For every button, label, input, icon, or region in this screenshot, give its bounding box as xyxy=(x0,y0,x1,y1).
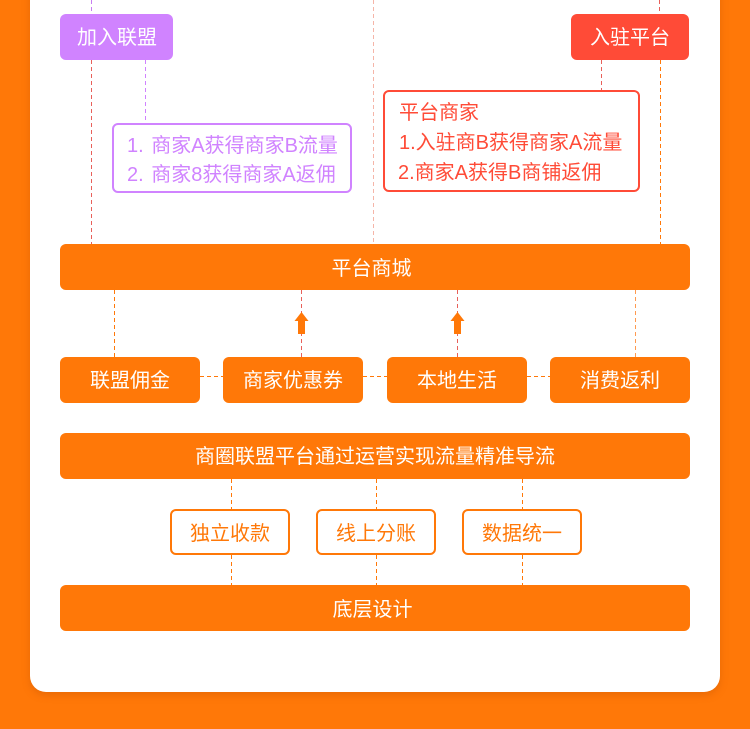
note: alliance benefits: 1. 商家A获得商家B流量 xyxy=(127,135,338,157)
bar: alliance traffic statement xyxy=(60,433,690,479)
box: consumer rebate: 消费返利 xyxy=(580,370,660,392)
box: independent payment xyxy=(170,509,290,555)
button: join platform: 入驻平台 xyxy=(590,27,670,49)
box: independent payment: 独立收款 xyxy=(190,523,270,545)
bar: alliance traffic statement: 商圈联盟平台通过运营实现流量精准导流 xyxy=(195,446,555,468)
box: online split: 线上分账 xyxy=(336,523,416,545)
box: alliance commission xyxy=(60,357,200,403)
note: platform merchant benefits: 平台商家 xyxy=(399,102,479,124)
bar: base design xyxy=(60,585,690,631)
box: unified data: 数据统一 xyxy=(482,523,562,545)
button: join alliance: 加入联盟 xyxy=(77,27,157,49)
note: platform merchant benefits: 2.商家A获得B商铺返佣 xyxy=(398,162,601,184)
button: join platform xyxy=(571,14,689,60)
icon: up arrow right xyxy=(450,312,464,334)
box: local life: 本地生活 xyxy=(417,370,497,392)
box: merchant coupons xyxy=(223,357,363,403)
bar: platform mall xyxy=(60,244,690,290)
bar: base design: 底层设计 xyxy=(332,599,412,621)
icon: up arrow left xyxy=(294,312,308,334)
note: platform merchant benefits: 1.入驻商B获得商家A流量 xyxy=(399,132,622,154)
box: online split xyxy=(316,509,436,555)
box: consumer rebate xyxy=(550,357,690,403)
box: merchant coupons: 商家优惠券 xyxy=(243,370,343,392)
note: alliance benefits xyxy=(112,123,352,193)
box: alliance commission: 联盟佣金 xyxy=(90,370,170,392)
box: unified data xyxy=(462,509,582,555)
note: platform merchant benefits xyxy=(383,90,640,192)
note: alliance benefits: 2. 商家8获得商家A返佣 xyxy=(127,164,336,186)
box: local life xyxy=(387,357,527,403)
button: join alliance xyxy=(60,14,173,60)
bar: platform mall: 平台商城 xyxy=(332,258,412,280)
